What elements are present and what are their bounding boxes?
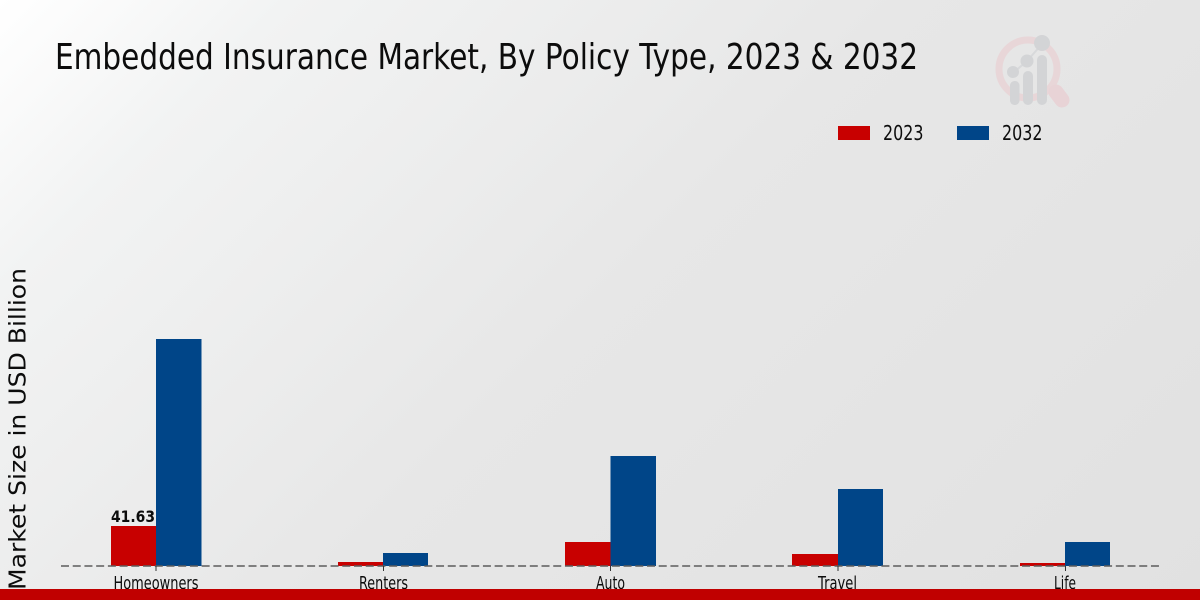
- category labels: Life: [1054, 573, 1076, 594]
- legend item: 2032: 2032: [1002, 121, 1042, 145]
- axis ticks: [156, 566, 1066, 571]
- category labels: Renters: [359, 573, 408, 594]
- bar chart: [61, 339, 1160, 594]
- bars: Life: [1020, 542, 1110, 566]
- bars: Renters: [338, 553, 428, 566]
- y-axis label: Market Size in USD Billion: [6, 268, 32, 590]
- legend item: 2023: 2023: [883, 121, 924, 145]
- legend item: 2032: [957, 121, 1042, 145]
- legend: [838, 121, 1042, 145]
- data value: 41.63: 41.63: [111, 507, 155, 526]
- watermark logo icon: [999, 35, 1062, 105]
- bars: Auto: [565, 456, 656, 566]
- category labels: [114, 573, 1076, 594]
- legend item: 2023: [838, 121, 924, 145]
- category labels: Homeowners: [114, 573, 198, 594]
- baseline: [61, 565, 1160, 567]
- title: Embedded Insurance Market, By Policy Type, 2023 & 2032: [55, 37, 918, 78]
- bottom red band: [0, 589, 1200, 600]
- category labels: Auto: [596, 573, 625, 594]
- category labels: Travel: [817, 573, 857, 594]
- bars: Homeowners: [111, 339, 202, 566]
- bars: Travel: [792, 489, 883, 566]
